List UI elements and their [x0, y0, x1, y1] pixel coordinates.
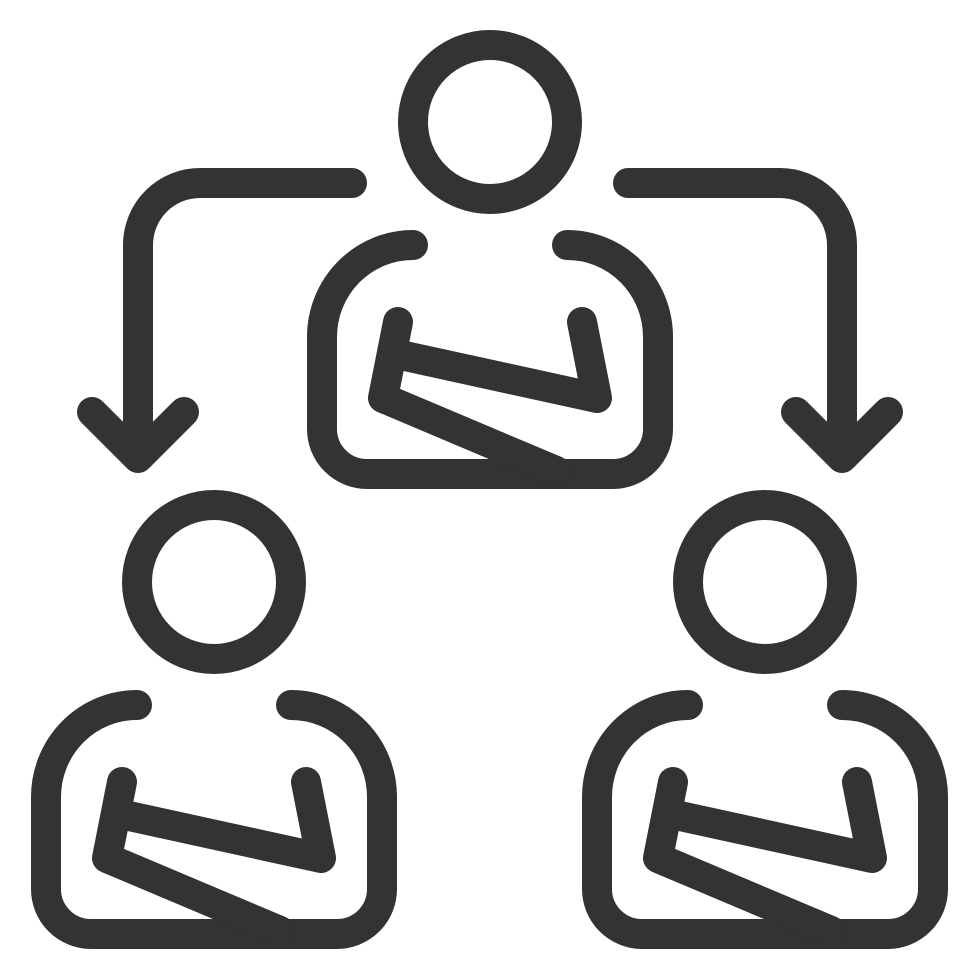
crossed arms: left person — [107, 782, 321, 931]
head: top person — [413, 45, 567, 199]
body: top person — [322, 245, 658, 474]
body: right person — [597, 705, 933, 934]
person: bottom right — [597, 505, 933, 934]
head: right person — [688, 505, 842, 659]
head: left person — [137, 505, 291, 659]
person: bottom left — [46, 505, 382, 934]
crossed arms: right person — [658, 782, 872, 931]
arrow: top person to left person — [92, 183, 352, 458]
body: left person — [46, 705, 382, 934]
arrow: top person to right person — [628, 183, 888, 458]
person: top — [322, 45, 658, 474]
crossed arms: top person — [383, 322, 597, 471]
